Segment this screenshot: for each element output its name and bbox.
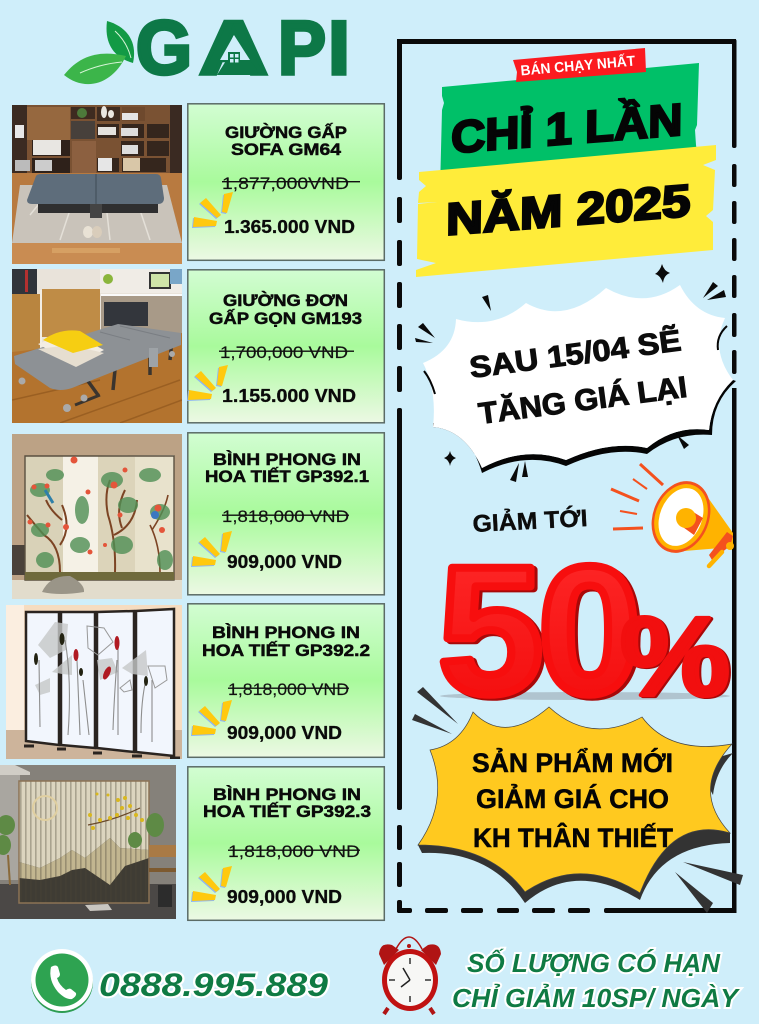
product card: GM64: GIƯỜNG GẤP: [225, 123, 347, 142]
icon: sparkle: [191, 866, 232, 902]
product card: GP392.3: [188, 767, 384, 920]
phone number: 0888.995.889: [99, 967, 328, 1003]
product card: GM64: 1,877,000VND: [222, 174, 349, 193]
yellow ribbon: [416, 145, 716, 277]
product card: GP392.3: BÌNH PHONG IN: [213, 785, 361, 804]
icon: house window in logo: [217, 35, 258, 75]
product card: GM193: 1,700,000 VND: [220, 343, 348, 362]
product card: GP392.1: 1,818,000 VND: [222, 507, 349, 526]
product card: GM64: SOFA GM64: [231, 140, 342, 159]
icon: sparkle: [192, 192, 233, 228]
icon: alarm clock: [379, 937, 441, 1014]
product card: GP392.2: 1,818,000 VND: [228, 680, 349, 699]
product card: GP392.1: BÌNH PHONG IN: [213, 450, 361, 469]
product card: GP392.1: HOA TIẾT GP392.1: [205, 467, 369, 486]
product card: GP392.2: BÌNH PHONG IN: [212, 623, 360, 642]
green ribbon: [440, 63, 700, 190]
banner: best seller tag and headline ribbons: [416, 48, 716, 277]
product card: GM64: [188, 104, 384, 260]
burst text line 1: SAU 15/04 SẼ: [467, 323, 683, 385]
product photo: folding single bed GM193: [12, 269, 182, 423]
graphic: 50% red 3D text: [438, 529, 732, 734]
icon: sparkle: [187, 365, 228, 401]
logo: GAPI: P: [278, 6, 326, 91]
tag text: BÁN CHẠY NHẤT: [520, 53, 636, 79]
icon: phone: [31, 949, 93, 1013]
icon: sparkle: [191, 700, 232, 736]
product photo: folding sofa bed GM64: [12, 105, 182, 264]
product card: GM64: 1.365.000 VND: [224, 217, 355, 237]
digit 0: 0: [538, 529, 641, 732]
product photo: mountain folding screen GP392.3: [0, 765, 176, 919]
product card: GP392.2: 909,000 VND: [227, 723, 342, 743]
icon: sparkle: [191, 531, 232, 567]
product card: GM193: 1.155.000 VND: [222, 386, 356, 406]
callout: new product discount burst: [412, 687, 743, 913]
burst text: [472, 746, 673, 853]
logo: GAPI: G: [136, 6, 192, 91]
icon: megaphone: [611, 464, 734, 566]
burst text: SẢN PHẨM MỚI: [472, 746, 673, 778]
product card: GM193: GẤP GỌN GM193: [209, 309, 362, 328]
digit 0: 0: [541, 531, 644, 734]
limited quantity text: CHỈ GIẢM 10SP/ NGÀY: [452, 983, 741, 1013]
icon: leaves: [64, 21, 134, 84]
digit 5: 5: [441, 531, 546, 734]
product card: GP392.3: 1,818,000 VND: [228, 842, 360, 861]
text: up to: GIẢM TỚI: [472, 503, 588, 538]
panel: dashed promo frame: [397, 39, 736, 913]
red tag: [513, 48, 646, 82]
percent sign: %: [622, 595, 732, 720]
percent sign: %: [620, 594, 730, 719]
digit 5: 5: [438, 529, 543, 732]
product card: GP392.2: HOA TIẾT GP392.2: [202, 641, 370, 660]
product card: GP392.3: 909,000 VND: [227, 887, 342, 907]
product card: GM193: GIƯỜNG ĐƠN: [223, 291, 348, 310]
product card: GP392.3: HOA TIẾT GP392.3: [203, 802, 371, 821]
headline line 1: CHỈ 1 LẦN: [451, 94, 683, 163]
burst text: KH THÂN THIẾT: [473, 822, 673, 853]
logo: GAPI: A: [199, 6, 268, 91]
burst text: GIẢM GIÁ CHO: [476, 782, 669, 814]
logo: GAPI: [64, 6, 350, 91]
accent spikes and stars around burst: [415, 264, 726, 482]
headline line 2: NĂM 2025: [446, 175, 691, 245]
callout: price rise burst: [423, 285, 736, 473]
product card: GP392.2: [188, 604, 384, 757]
limited quantity text: [452, 948, 741, 1013]
product photo: lotus folding screen GP392.2: [6, 605, 182, 759]
product card: GP392.1: 909,000 VND: [227, 552, 342, 572]
burst text line 2: TĂNG GIÁ LẠI: [476, 370, 689, 431]
product photo: floral folding screen GP392.1: [12, 434, 182, 599]
logo: GAPI: I: [328, 6, 350, 91]
limited quantity text: SỐ LƯỢNG CÓ HẠN: [467, 948, 721, 978]
product card: GM193: [187, 270, 384, 423]
product card: GP392.1: [188, 433, 384, 595]
